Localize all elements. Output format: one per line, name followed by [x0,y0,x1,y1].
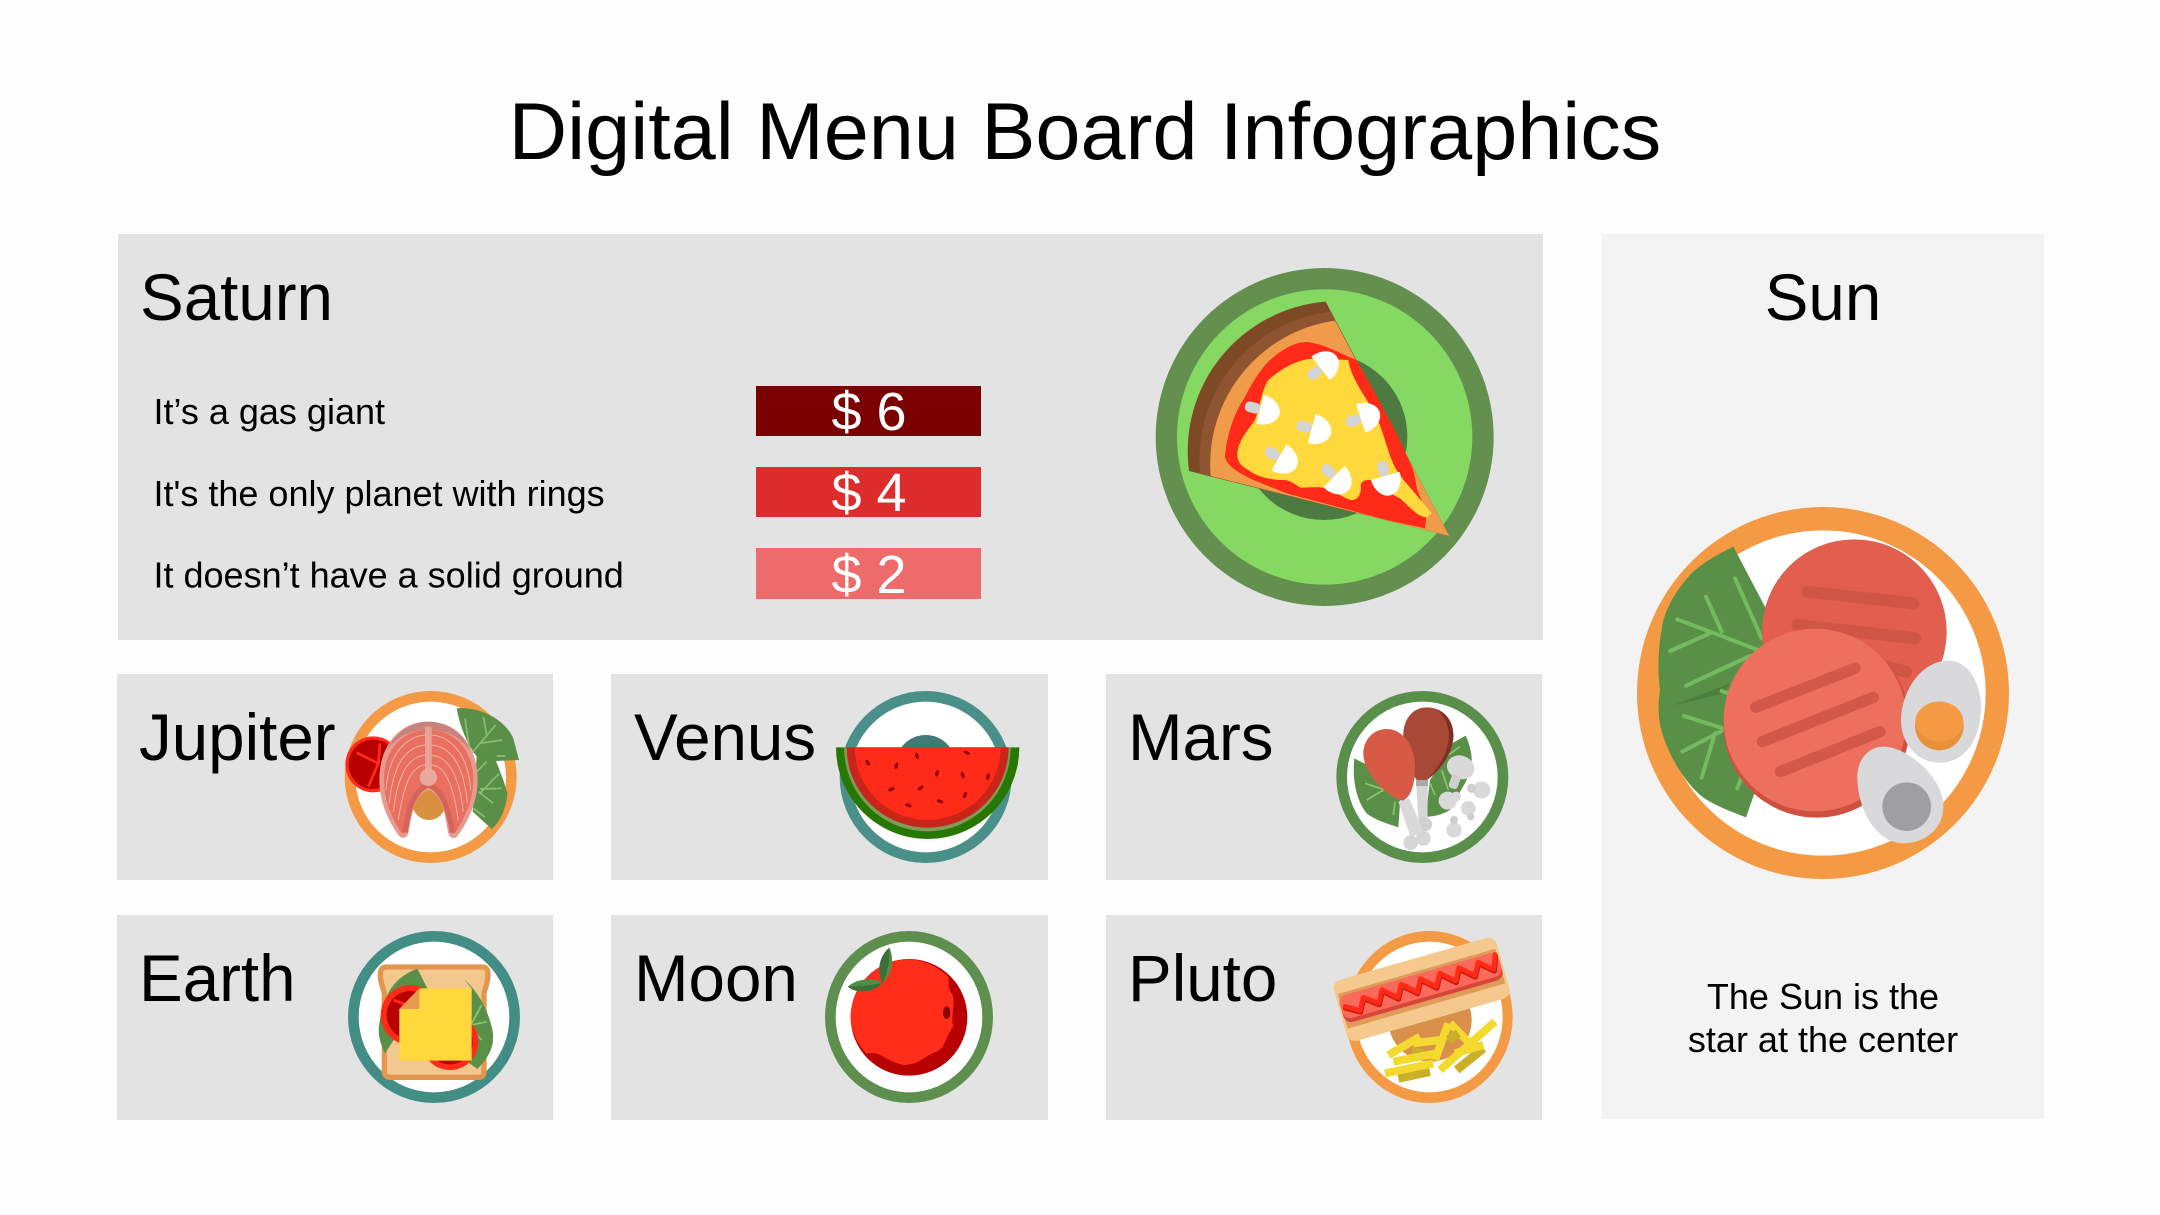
panel: Venus [611,674,1048,880]
icon: sandwich plate [348,931,520,1103]
price tag: $ 4 [756,463,981,523]
panel: Jupiter [117,674,553,880]
heading: Saturn: Saturn [140,261,333,334]
title: Digital Menu Board Infographics [509,87,1661,177]
panel: Earth [117,915,553,1120]
panel: Sun [1602,234,2044,1119]
heading: Sun: Sun [1765,261,1881,334]
icon: salmon plate [345,691,519,863]
menu row 3 text: It doesn’t have a solid ground [154,554,624,596]
heading: Earth: Earth [139,942,296,1015]
description text: star at the center [1688,1019,1958,1060]
icon: hot dog and fries plate [1332,931,1513,1103]
panel: Moon [611,915,1048,1120]
description text: The Sun is the [1707,976,1939,1017]
heading: Pluto: Pluto [1128,942,1277,1015]
icon: chicken plate [1336,691,1508,863]
menu row 1 text: It’s a gas giant [154,391,385,432]
icon: watermelon plate [836,691,1019,863]
heading: Mars: Mars [1128,701,1274,774]
price tag: $ 6 [756,382,981,442]
icon: tomato plate [825,931,993,1103]
price tag: $ 2: $ 2 [831,545,907,605]
icon: pizza plate [1156,268,1494,606]
panel: Saturn [118,234,1543,640]
icon: meat and egg plate [1637,507,2009,879]
panel: Pluto [1106,915,1542,1120]
heading: Moon: Moon [634,942,798,1015]
price tag: $ 2 [756,545,981,605]
heading: Jupiter: Jupiter [139,701,336,774]
menu row 2 text: It's the only planet with rings [154,473,605,514]
price tag: $ 4: $ 4 [831,463,907,523]
heading: Venus: Venus [634,701,816,774]
panel: Mars [1106,674,1542,880]
price tag: $ 6: $ 6 [831,382,907,442]
